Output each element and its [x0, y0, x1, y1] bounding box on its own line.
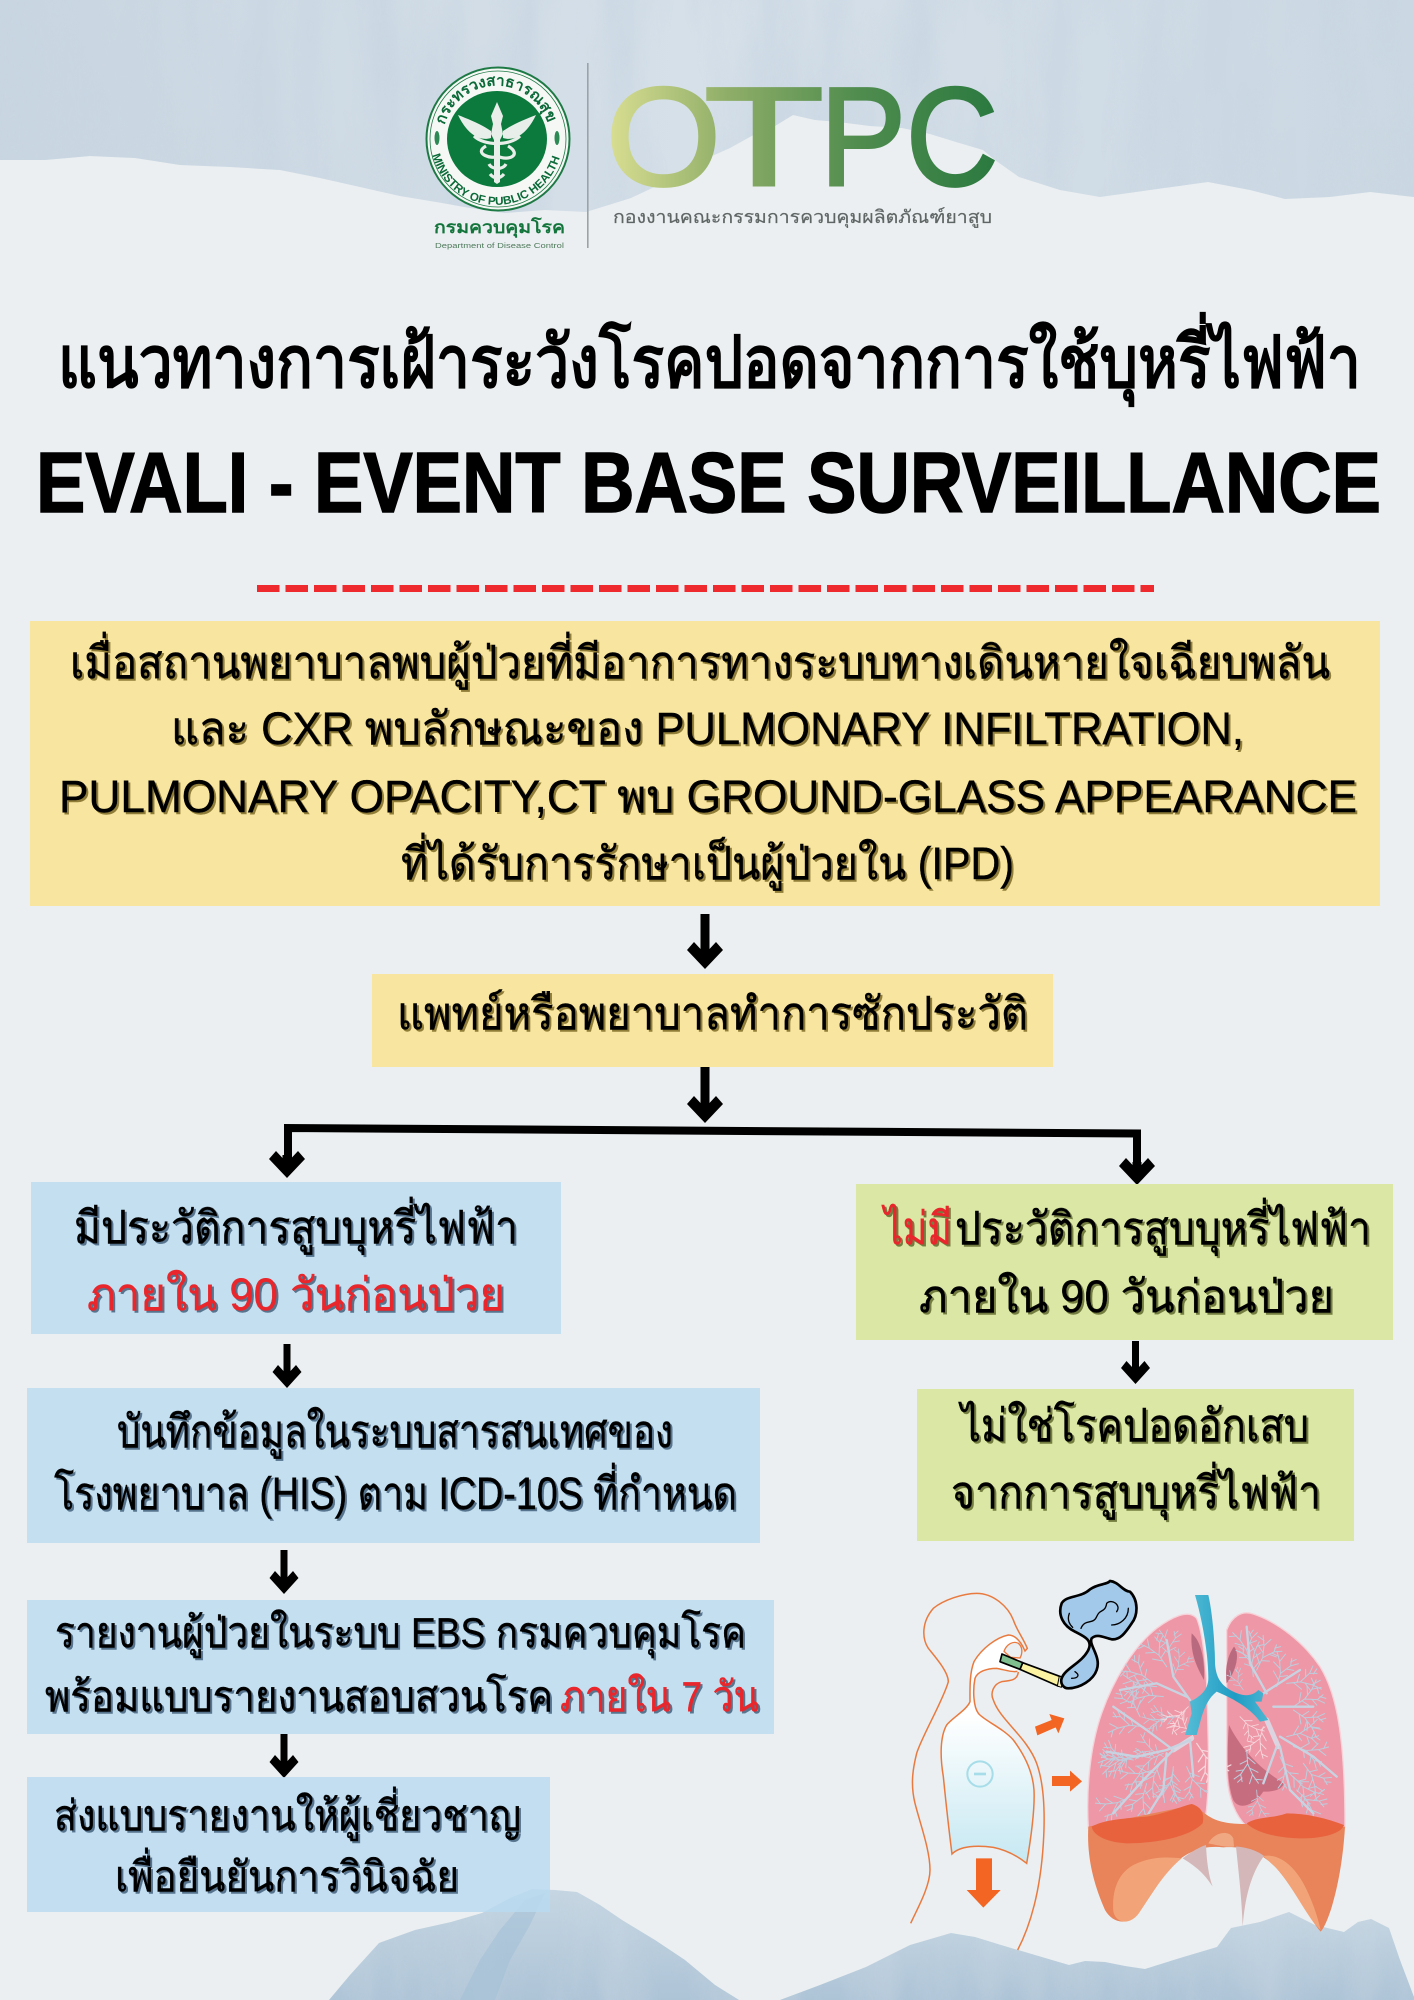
panel: not vaping-related pneumonia: ไม่ใช่โรคปอดอักเสบ [958, 1400, 1309, 1451]
illustration: orange arrow down [967, 1858, 1001, 1908]
logo: OTPC wordmark: O [606, 58, 721, 215]
illustration: lungs [1088, 1613, 1345, 1833]
arrow: no history to not a vaping lung disease [1121, 1341, 1150, 1384]
red dashed separator [257, 585, 1154, 592]
logo divider [587, 63, 589, 248]
criteria line 2: และ CXR พบลักษณะของ PULMONARY INFILTRATION, [171, 703, 1244, 754]
logo: Thai department name: กรมควบคุมโรค [434, 217, 565, 238]
illustration: cigarette [1000, 1654, 1063, 1687]
panel: send report to experts: เพื่อยืนยันการวินิจฉัย [115, 1848, 459, 1900]
illustration: orange arrow right [1052, 1771, 1082, 1792]
logo: OTPC Thai subtitle: กองงานคณะกรรมการควบคุมผลิตภัณฑ์ยาสูบ [613, 207, 992, 228]
panel: record in hospital information system: บันทึกข้อมูลในระบบสารสนเทศของ [117, 1406, 673, 1459]
illustration: orange arrow diagonal [1035, 1714, 1064, 1735]
panel: hospital finding criteria [30, 621, 1380, 906]
illustration: diaphragm [1088, 1804, 1345, 1932]
panel: record in hospital information system [27, 1388, 760, 1543]
illustration: vaping and lungs [911, 1581, 1345, 1950]
panel: history taking: แพทย์หรือพยาบาลทำการซักประวัติ [397, 988, 1028, 1039]
panel: record in hospital information system: โรงพยาบาล (HIS) ตาม ICD-10S ที่กำหนด [54, 1462, 737, 1519]
panel: has vaping history: ภายใน 90 วันก่อนป่วย [87, 1269, 505, 1320]
seal caduceus emblem [458, 102, 536, 184]
panel: not vaping-related pneumonia: จากการสูบบุหรี่ไฟฟ้า [951, 1461, 1321, 1520]
torn paper header background [0, 0, 1414, 220]
seal ring text: ministry name in Thai: กระทรวงสาธารณสุข [437, 76, 556, 124]
panel: no vaping history: ประวัติการสูบบุหรี่ไฟฟ้า [955, 1197, 1371, 1256]
illustration: minus sign (negative pressure) [967, 1761, 993, 1787]
panel: has vaping history: มีประวัติการสูบบุหรี่ไฟฟ้า [74, 1196, 518, 1255]
panel: report in EBS within 7 days: รายงานผู้ป่วยในระบบ EBS กรมควบคุมโรค [55, 1608, 746, 1659]
panel: send report to experts: ส่งแบบรายงานให้ผู้เชี่ยวชาญ [54, 1787, 521, 1841]
criteria line 3: PULMONARY OPACITY,CT พบ GROUND-GLASS APPEARANCE [59, 771, 1357, 822]
arrow: branch connector to both outcomes [269, 1067, 1155, 1185]
panel: report in EBS within 7 days [27, 1600, 774, 1734]
logo: Department of Disease Control seal [426, 66, 570, 212]
panel: no vaping history [856, 1184, 1393, 1340]
criteria line 4: ที่ได้รับการรักษาเป็นผู้ป่วยใน (IPD) [401, 832, 1014, 891]
illustration: trachea and bronchi [1185, 1595, 1268, 1735]
panel: report in EBS within 7 days: พร้อมแบบรายงานสอบสวนโรค [45, 1672, 553, 1720]
panel: not vaping-related pneumonia [917, 1389, 1354, 1541]
logo: OTPC wordmark: C [906, 58, 998, 215]
logo: English department name: Department of Disease Control [435, 243, 565, 250]
logo: OTPC wordmark: P [820, 58, 906, 215]
panel: no vaping history: ภายใน 90 วันก่อนป่วย [919, 1271, 1334, 1322]
logo: OTPC wordmark: T [704, 58, 824, 215]
panel: no vaping history: ไม่มี [882, 1203, 952, 1254]
logo: OTPC wordmark [606, 58, 998, 215]
bottom watercolor mountains [320, 1880, 1414, 2000]
panel: has vaping history [31, 1182, 561, 1334]
arrow: record data to report [270, 1550, 298, 1594]
arrow: criteria to history taking [687, 914, 723, 969]
panel: send report to experts [27, 1777, 550, 1912]
panel: history taking [372, 974, 1053, 1067]
arrow: has history to record data [272, 1344, 302, 1388]
panel: report in EBS within 7 days: ภายใน 7 วัน [560, 1673, 759, 1720]
seal ring text: ministry name in English: MINISTRY OF PUBLIC HEALTH [432, 153, 560, 205]
arrow: report to expert review [270, 1734, 298, 1778]
illustration: body cross-section [911, 1593, 1044, 1950]
criteria line 1: เมื่อสถานพยาบาลพบผู้ป่วยที่มีอาการทางระบบทางเดินหายใจเฉียบพลัน [70, 631, 1330, 690]
illustration: smoke cloud [1060, 1581, 1136, 1688]
illustration: bronchial tree [1091, 1627, 1337, 1825]
